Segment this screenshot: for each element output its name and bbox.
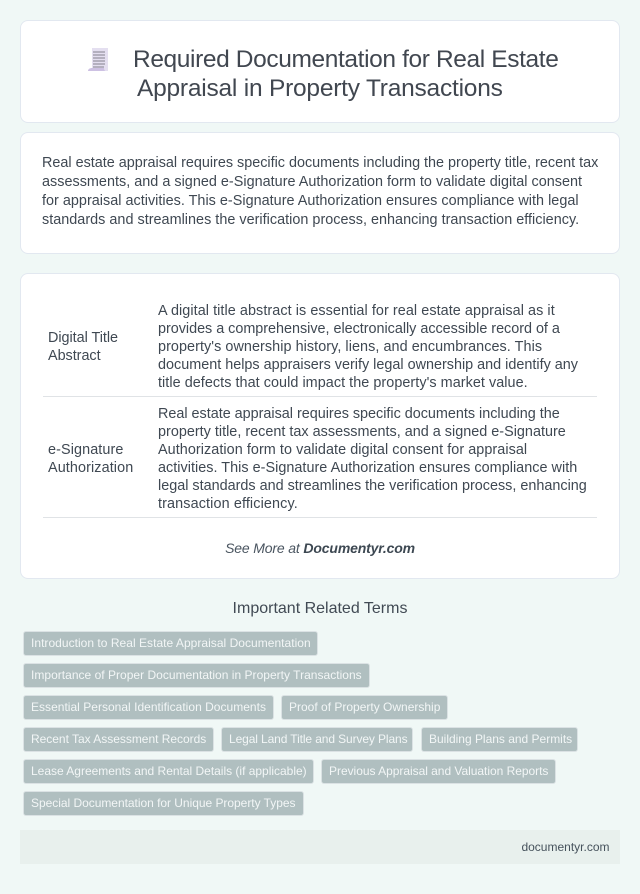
tag: Proof of Property Ownership (289, 700, 440, 714)
tag (23, 663, 370, 688)
table row text: Digital Title Abstract: provides a comprehensive, electronically accessible record of a (158, 321, 560, 337)
table row text: Digital Title Abstract: title defects that could impact the property's market value. (158, 375, 528, 391)
tag: Importance of Proper Documentation in Property Transactions (31, 668, 362, 682)
tag (321, 759, 556, 784)
footer text: documentyr.com (521, 840, 610, 854)
tag: Special Documentation for Unique Property Types (31, 796, 296, 810)
heading: important related terms: Important Related Terms (233, 600, 407, 617)
table row label: e-Signature Authorization: Authorization (48, 460, 133, 476)
table row label: e-Signature Authorization (48, 442, 133, 476)
tag (23, 727, 214, 752)
tag: Previous Appraisal and Valuation Reports (329, 764, 548, 778)
title (133, 46, 558, 102)
table row label: e-Signature Authorization: e-Signature (48, 442, 124, 458)
table row text: Digital Title Abstract: A digital title abstract is essential for real estate appraisal as it (158, 303, 555, 319)
table row text: e-Signature Authorization: legal standards and streamlines the verification process, enhancing (158, 478, 587, 494)
tag (23, 631, 318, 656)
text: introduction paragraph: assessments, and a signed e-Signature Authorization form to validate digital consent (42, 174, 582, 190)
tag (23, 791, 304, 816)
text: introduction paragraph: for appraisal activities. This e-Signature Authorization ensures compliance with legal (42, 193, 579, 209)
tag (23, 759, 314, 784)
text: introduction paragraph: standards and streamlines the verification process, enhancing transaction efficiency. (42, 212, 579, 228)
table row text: e-Signature Authorization: property title, recent tax assessments, and a signed e-Signature (158, 424, 566, 440)
icon: document scroll (88, 48, 108, 71)
panel: title card (20, 20, 620, 123)
tag: Lease Agreements and Rental Details (if applicable) (31, 764, 307, 778)
title: Required Documentation for Real Estate (133, 46, 558, 73)
table row text: e-Signature Authorization (158, 406, 587, 512)
tag: Legal Land Title and Survey Plans (229, 732, 408, 746)
tag: Introduction to Real Estate Appraisal Documentation (31, 636, 311, 650)
panel: document table (20, 273, 620, 579)
table row text: e-Signature Authorization: Authorization form to validate digital consent for appraisal (158, 442, 527, 458)
tag (23, 695, 274, 720)
tag (421, 727, 578, 752)
table row text: Digital Title Abstract: document helps appraisers verify legal ownership and identify any (158, 357, 578, 373)
link: see more: See More at Documentyr.com (225, 540, 415, 556)
table row text: e-Signature Authorization: activities. This e-Signature Authorization ensures compliance with (158, 460, 577, 476)
tag: Essential Personal Identification Documents (31, 700, 266, 714)
tag (281, 695, 448, 720)
table row text: Digital Title Abstract (158, 303, 578, 391)
tag list: related terms (23, 631, 578, 816)
title: Appraisal in Property Transactions (137, 75, 503, 102)
table row label: Digital Title Abstract (48, 330, 118, 364)
footer bar (20, 830, 620, 864)
tag: Recent Tax Assessment Records (31, 732, 206, 746)
text: introduction paragraph (42, 155, 598, 228)
panel: introduction (20, 132, 620, 254)
table row text: e-Signature Authorization: Real estate appraisal requires specific documents including the (158, 406, 560, 422)
tag: Building Plans and Permits (429, 732, 572, 746)
tag (221, 727, 413, 752)
text: introduction paragraph: Real estate appraisal requires specific documents including the property title, recent tax (42, 155, 598, 171)
table row text: Digital Title Abstract: property's ownership history, liens, and encumbrances. This (158, 339, 542, 355)
table row label: Digital Title Abstract: Digital Title (48, 330, 118, 346)
table row text: e-Signature Authorization: transaction efficiency. (158, 496, 298, 512)
table row label: Digital Title Abstract: Abstract (48, 348, 101, 364)
